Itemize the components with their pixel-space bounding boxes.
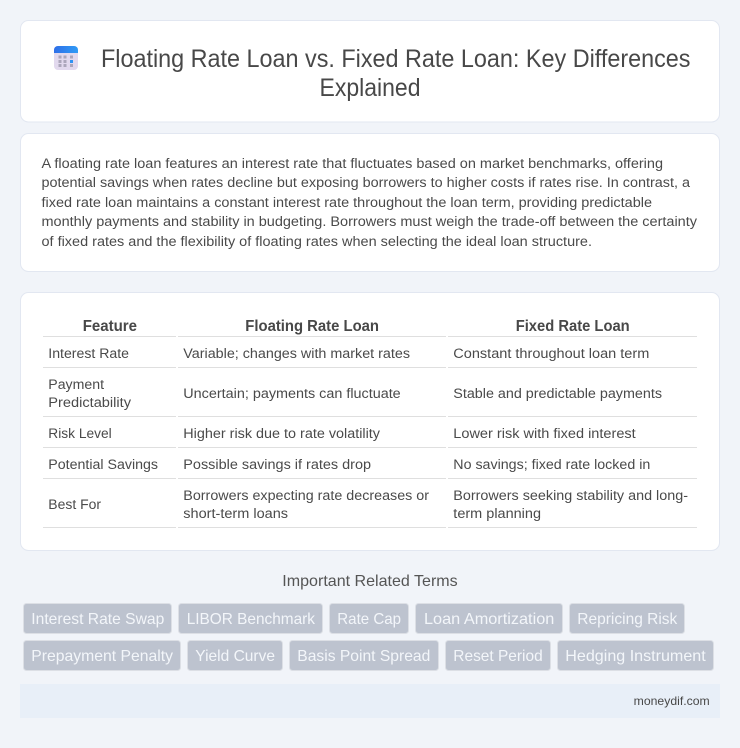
tag: prepayment penalty: Prepayment Penalty (31, 648, 173, 665)
title (101, 46, 690, 102)
table row: best for: Borrowers seeking stability and long- (453, 488, 688, 504)
text block: introduction paragraph: A floating rate loan features an interest rate that fluctuates based on market benchmarks, offering (42, 156, 663, 172)
panel: title header (20, 20, 720, 122)
heading: important related terms: Important Related Terms (282, 573, 458, 590)
tag: libor benchmark: LIBOR Benchmark (187, 611, 316, 628)
table row: best for (48, 488, 688, 522)
table header row (83, 318, 630, 335)
tag: reset period (446, 640, 550, 670)
table row: payment predictability (48, 377, 662, 411)
tag: yield curve (188, 640, 282, 670)
tag: loan amortization (416, 604, 562, 634)
text block: introduction paragraph: potential savings when rates decline but exposing borrowers to higher costs if rates rise. In contrast, a (42, 175, 690, 191)
tag group: related terms (24, 604, 714, 670)
tag: interest rate swap (24, 604, 172, 634)
tag: loan amortization: Loan Amortization (424, 611, 554, 628)
table row: payment predictability: Stable and predictable payments (453, 386, 662, 402)
footer bar (20, 684, 720, 718)
tag: repricing risk: Repricing Risk (577, 611, 678, 628)
panel: introduction (20, 134, 720, 272)
tag: repricing risk (570, 604, 684, 634)
tag: hedging instrument (558, 640, 714, 670)
tag: basis point spread (290, 640, 438, 670)
tag: reset period: Reset Period (453, 648, 543, 665)
panel: comparison table (20, 292, 720, 550)
text block: introduction paragraph (42, 156, 698, 250)
table row: payment predictability: Uncertain; payments can fluctuate (183, 386, 401, 402)
table row: payment predictability: Predictability (48, 395, 132, 411)
footer credit: moneydif.com (634, 694, 710, 708)
table row: potential savings: No savings; fixed rate locked in (453, 457, 650, 473)
table row: potential savings (48, 457, 650, 473)
table row: payment predictability: Payment (48, 377, 104, 393)
text block: introduction paragraph: monthly payments and stability in budgeting. Borrowers must weigh the trade-off between the certainty (42, 214, 698, 230)
table row: interest rate: Interest Rate (48, 346, 129, 362)
table row: potential savings: Potential Savings (48, 457, 158, 473)
title: Explained (320, 75, 420, 102)
text block: introduction paragraph: of fixed rates and the flexibility of floating rates when selecting the ideal loan structure. (42, 234, 592, 250)
tag: rate cap (330, 604, 408, 634)
table header row: Feature (83, 318, 137, 335)
table row: best for: term planning (453, 506, 541, 522)
tag: libor benchmark (178, 604, 322, 634)
table row: interest rate (48, 346, 649, 362)
table row: interest rate: Variable; changes with market rates (183, 346, 410, 362)
table row: best for: Borrowers expecting rate decreases or (183, 488, 429, 504)
tag: rate cap: Rate Cap (337, 611, 401, 628)
table row: risk level: Higher risk due to rate volatility (183, 426, 381, 442)
table row: risk level: Lower risk with fixed interest (453, 426, 636, 442)
tag: prepayment penalty (24, 640, 180, 670)
tag: yield curve: Yield Curve (195, 648, 275, 665)
tag: basis point spread: Basis Point Spread (297, 648, 430, 665)
table header row: Floating Rate Loan (245, 318, 379, 335)
table row: risk level: Risk Level (48, 426, 112, 442)
table header row: Fixed Rate Loan (516, 318, 630, 335)
table row: interest rate: Constant throughout loan term (453, 346, 649, 362)
table row: potential savings: Possible savings if rates drop (183, 457, 371, 473)
table row: best for: Best For (48, 497, 101, 513)
icon: calendar (54, 46, 78, 70)
tag: interest rate swap: Interest Rate Swap (31, 611, 164, 628)
tag: hedging instrument: Hedging Instrument (565, 648, 706, 665)
title: Floating Rate Loan vs. Fixed Rate Loan: Key Differences (101, 46, 690, 73)
text block: introduction paragraph: fixed rate loan maintains a constant interest rate throughout the loan term, providing predictable (42, 195, 652, 211)
table row: best for: short-term loans (183, 506, 288, 522)
table row: risk level (48, 426, 636, 442)
